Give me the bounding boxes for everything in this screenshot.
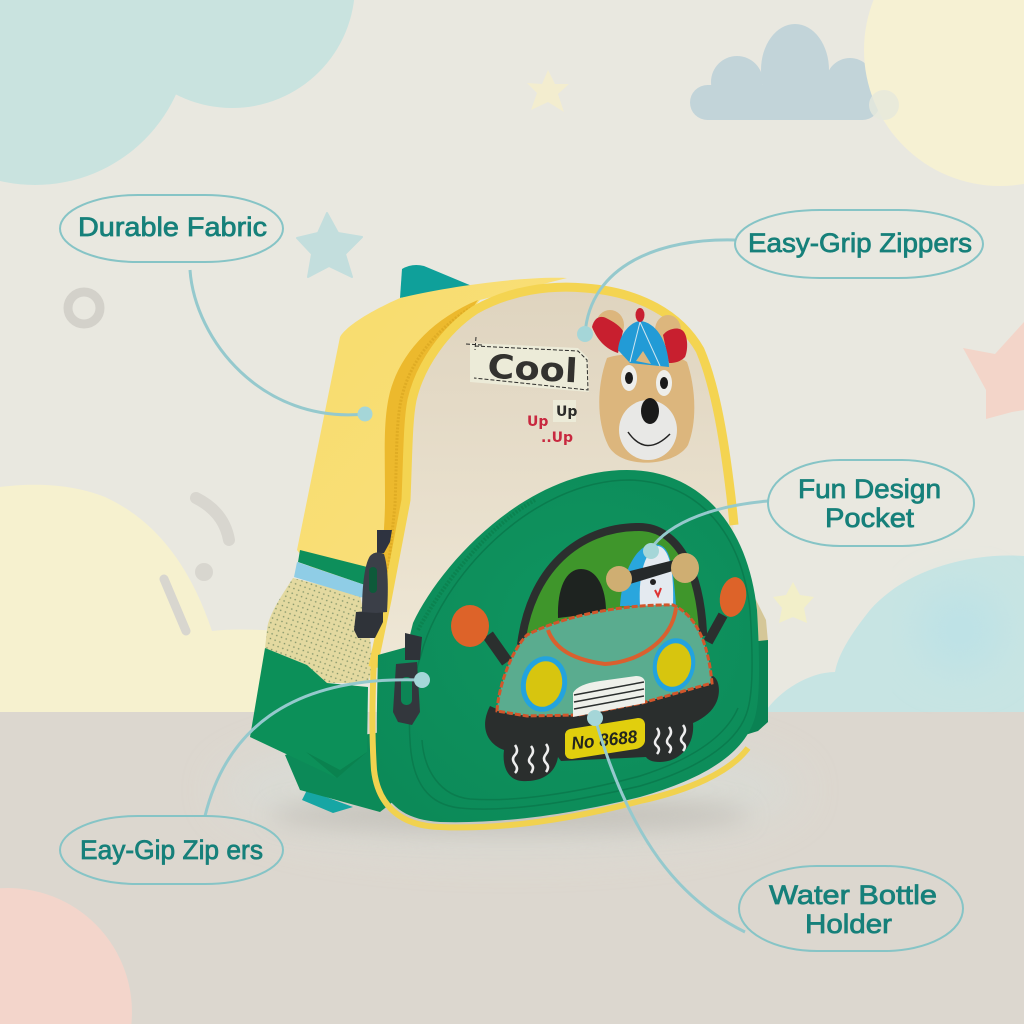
label: Eay-Gip Zip ers: Eay-Gip Zip ers	[80, 835, 263, 865]
label: Fun Design Pocket: Pocket	[825, 503, 915, 533]
connector: fun design pocket	[643, 501, 768, 559]
zipper pull lower	[393, 633, 422, 725]
lower body green	[285, 730, 395, 812]
decorative star cream	[527, 70, 569, 112]
green pocket	[377, 470, 759, 822]
label: Water Bottle Holder	[739, 866, 963, 951]
car dark window	[558, 569, 606, 618]
pocket zipper band	[418, 500, 535, 630]
backpack illustration	[250, 265, 768, 827]
decorative star pink	[963, 322, 1024, 419]
handle loop	[400, 265, 472, 298]
car window frame	[521, 527, 703, 645]
connector: water bottle holder	[587, 710, 745, 932]
yellow piping lower	[372, 660, 748, 827]
decorative ring	[68, 292, 100, 324]
zipper teeth	[386, 308, 470, 590]
car arm left and orange mirror	[451, 605, 507, 662]
zipper pull upper	[354, 530, 392, 638]
decorative grey marks	[164, 498, 229, 631]
right side strip	[745, 640, 768, 735]
front panel beige	[373, 287, 735, 700]
floor light area	[220, 730, 800, 850]
side pocket green	[250, 648, 368, 778]
car arm right and orange mirror	[708, 575, 749, 642]
cool tag: Cool	[487, 347, 579, 390]
yellow piping upper	[373, 287, 734, 667]
headlight right	[648, 634, 700, 696]
side panel yellow	[297, 278, 567, 590]
license plate: No 8688	[571, 727, 638, 753]
label: Easy-Grip Zippers	[735, 210, 983, 278]
zipper tape	[378, 300, 478, 600]
floor shadow	[270, 797, 750, 833]
connector: easy-grip zippers	[577, 240, 735, 342]
cool tag	[466, 337, 589, 392]
headlight left	[516, 652, 572, 716]
label: Water Bottle Holder: Water Bottle	[769, 880, 937, 910]
decorative star teal	[297, 213, 362, 277]
grill	[573, 676, 645, 717]
decorative pink circle bottom left	[0, 888, 132, 1024]
decorative cream hill left	[0, 485, 300, 712]
connector: durable fabric	[190, 270, 372, 422]
side pocket trim	[294, 550, 395, 602]
connector: lower zipper label	[205, 672, 430, 816]
decorative blue hill right	[765, 556, 1024, 712]
label: Fun Design Pocket: Fun Design	[798, 474, 941, 504]
side pocket fold	[306, 752, 367, 778]
license plate	[565, 718, 645, 759]
decorative cloud blue	[690, 24, 880, 120]
label: Durable Fabric	[60, 195, 283, 262]
windshield curve	[548, 608, 676, 664]
right mesh peek	[752, 598, 768, 642]
background floor	[0, 712, 1024, 1024]
mesh pocket	[265, 578, 372, 683]
decorative small circle	[869, 90, 899, 120]
driver character	[606, 544, 699, 606]
decorative star yellow	[773, 582, 814, 623]
bear character	[592, 308, 694, 463]
decorative cloud top left	[0, 0, 355, 185]
up stickers: Up	[556, 404, 577, 420]
background wall	[0, 0, 1024, 712]
pocket seam outer	[409, 480, 752, 809]
label: Fun Design Pocket	[768, 460, 974, 546]
up stickers: ..Up	[541, 430, 573, 446]
pocket seam inner	[422, 708, 738, 800]
tyre treads	[513, 725, 685, 773]
car bumper and tyres	[485, 676, 719, 781]
label: Easy-Grip Zippers: Easy-Grip Zippers	[748, 228, 972, 258]
decorative sun top right	[864, 0, 1024, 186]
bottom strap	[302, 790, 353, 813]
car body	[497, 605, 712, 716]
label: Durable Fabric: Durable Fabric	[78, 212, 267, 242]
label: Water Bottle Holder: Holder	[805, 909, 892, 939]
up stickers	[527, 400, 577, 446]
label: Eay-Gip Zip ers	[60, 816, 283, 884]
up stickers: Up	[527, 414, 548, 430]
